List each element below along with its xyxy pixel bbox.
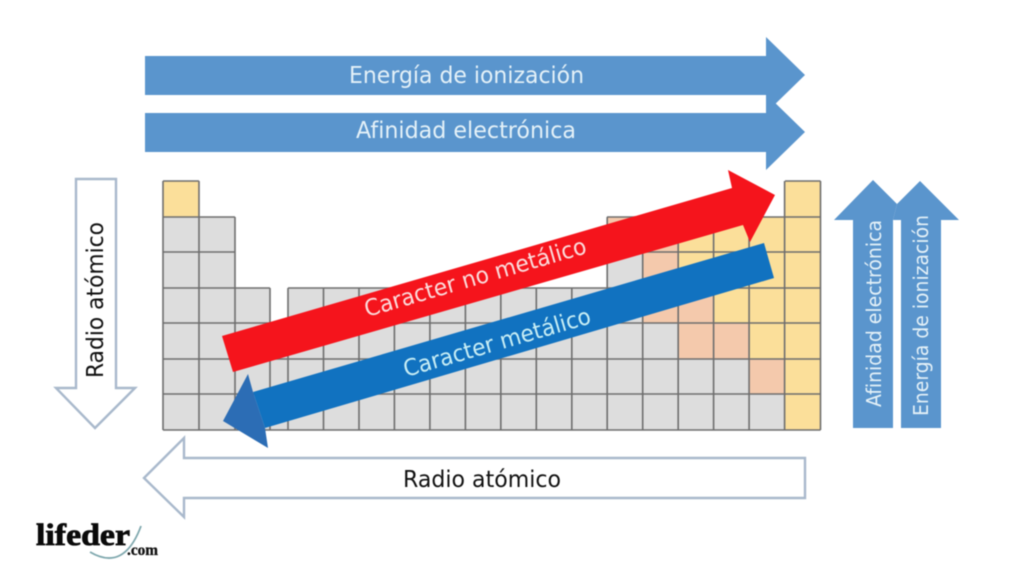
label: caracter metálico: Caracter metálico: [400, 304, 594, 383]
logo: lifeder.com: .com: [127, 542, 159, 559]
arrow: energía de ionización (horizontal): [145, 37, 805, 113]
arrow: caracter metálico (blue): [223, 243, 774, 448]
label: afinidad electrónica vertical: Afinidad electrónica: [862, 220, 886, 407]
label: afinidad electrónica: Afinidad electrónica: [356, 118, 576, 144]
arrow: radio atómico (left, hollow): [144, 438, 805, 517]
arrow: afinidad electrónica (vertical): [834, 180, 897, 428]
logo: lifeder.com: [36, 517, 159, 559]
arrow: energía de ionización (vertical): [893, 181, 959, 428]
label: energía de ionización: Energía de ionización: [349, 63, 584, 89]
arrow: caracter no metálico (red): [222, 170, 775, 372]
label: energía de ionización vertical: Energía de ionización: [909, 215, 933, 416]
label: radio atómico vertical: Radio atómico: [83, 222, 109, 378]
arrow: afinidad electrónica (horizontal): [145, 94, 805, 170]
logo: lifeder.com: lifeder: [36, 517, 130, 552]
label: radio atómico horizontal: Radio atómico: [403, 467, 561, 493]
label: caracter no metálico: Caracter no metálico: [361, 234, 590, 323]
periodic table grid: [163, 181, 820, 430]
arrow: radio atómico (down, hollow): [56, 179, 135, 428]
